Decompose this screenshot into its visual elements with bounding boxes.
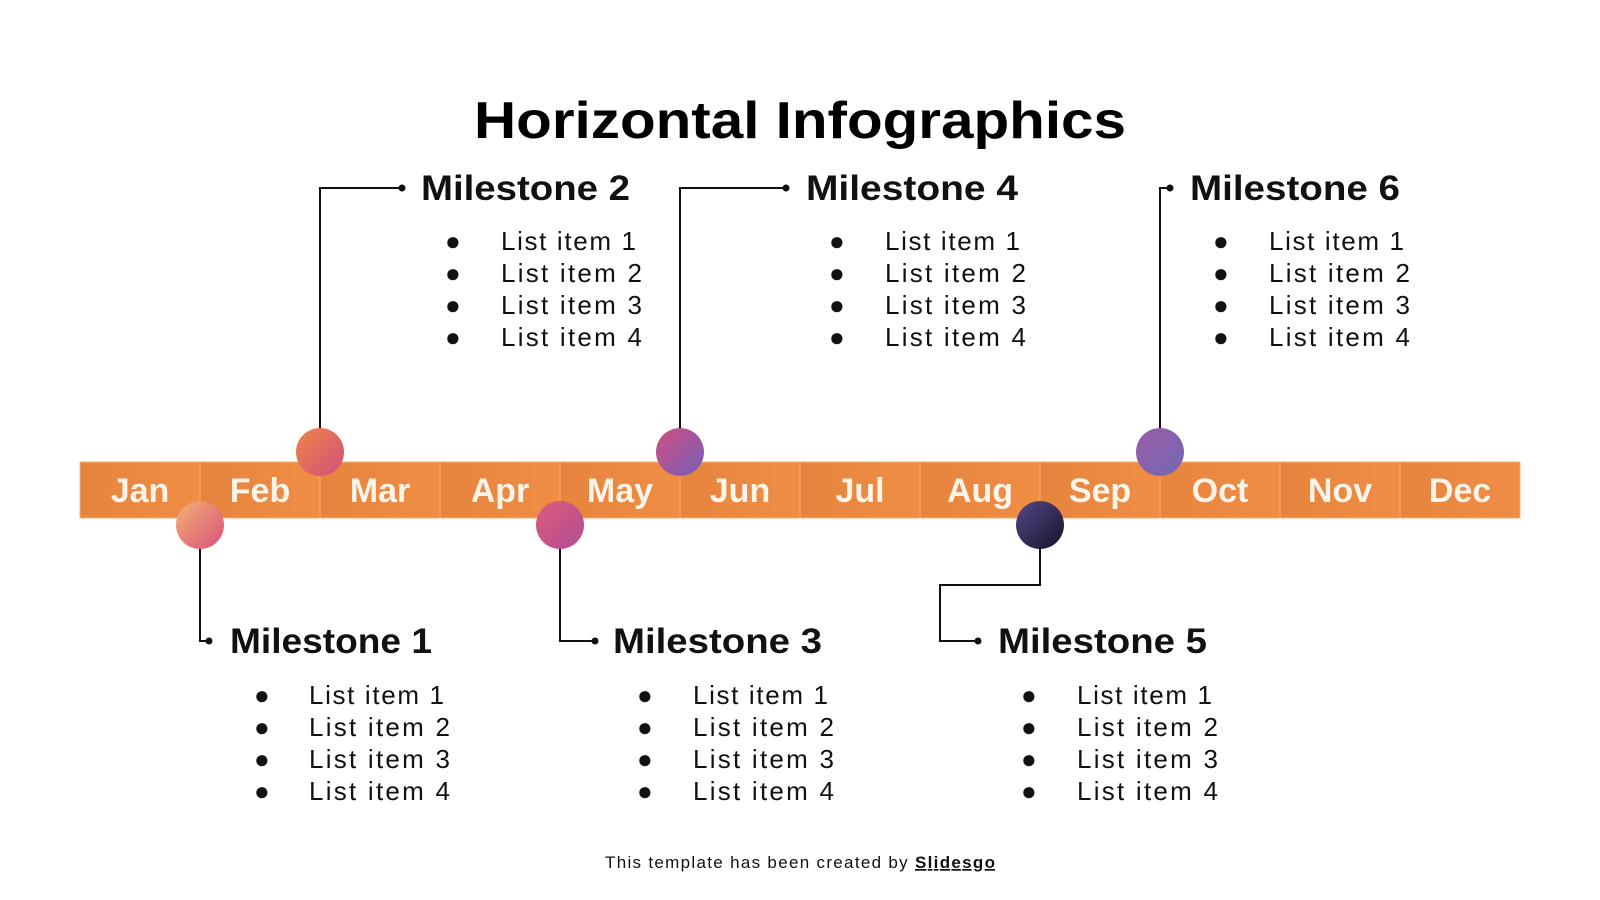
milestone 1: ● xyxy=(254,712,270,742)
milestone 4: List item 3 xyxy=(885,290,1026,320)
milestone 5: List item 3 xyxy=(1077,744,1218,774)
milestone 4: Milestone 4 xyxy=(806,169,1019,208)
milestone 1: ● xyxy=(254,744,270,774)
milestone 5: List item 1 xyxy=(1077,680,1212,710)
connectors xyxy=(200,188,1170,641)
milestone 3: List item 2 xyxy=(693,712,834,742)
title: Horizontal Infographics xyxy=(474,92,1126,150)
timeline bar: Mar xyxy=(350,472,410,510)
milestone 6: ● xyxy=(1213,290,1229,320)
timeline bar: Feb xyxy=(230,472,290,510)
milestone markers xyxy=(176,428,1184,549)
milestone 1: ● xyxy=(254,680,270,710)
milestone 3: ● xyxy=(637,744,653,774)
milestone 4: ● xyxy=(829,258,845,288)
milestone 5: List item 2 xyxy=(1077,712,1218,742)
milestone 1: List item 2 xyxy=(309,712,450,742)
milestone 4: List item 4 xyxy=(885,322,1026,352)
milestone 6: ● xyxy=(1213,322,1229,352)
milestone 2: List item 4 xyxy=(501,322,642,352)
milestone 2: ● xyxy=(445,322,461,352)
milestone 3: List item 4 xyxy=(693,776,834,806)
milestone 4: List item 1 xyxy=(885,226,1020,256)
milestone 2 xyxy=(421,169,642,352)
milestone 3: Milestone 3 xyxy=(613,622,822,661)
milestone 2: Milestone 2 xyxy=(421,169,630,208)
milestone 1 xyxy=(230,622,450,806)
milestone 5: ● xyxy=(1021,712,1037,742)
milestone 4 xyxy=(806,169,1026,352)
milestone 4: ● xyxy=(829,322,845,352)
milestone 3 xyxy=(613,622,834,806)
timeline bar: Nov xyxy=(1308,472,1372,510)
timeline bar: Sep xyxy=(1069,472,1131,510)
timeline bar: Apr xyxy=(471,472,529,510)
milestone 2: ● xyxy=(445,290,461,320)
milestone 2: ● xyxy=(445,226,461,256)
milestone 3: List item 1 xyxy=(693,680,828,710)
milestone 3: ● xyxy=(637,776,653,806)
timeline bar: Jan xyxy=(111,472,169,510)
milestone 5: ● xyxy=(1021,744,1037,774)
milestone 6: List item 3 xyxy=(1269,290,1410,320)
milestone 5: ● xyxy=(1021,680,1037,710)
timeline bar: Jun xyxy=(710,472,770,510)
milestone 4: ● xyxy=(829,226,845,256)
milestone 3: ● xyxy=(637,680,653,710)
milestone 2: List item 3 xyxy=(501,290,642,320)
milestone 6: ● xyxy=(1213,258,1229,288)
milestone 3: List item 3 xyxy=(693,744,834,774)
milestone 6: ● xyxy=(1213,226,1229,256)
milestone 5: ● xyxy=(1021,776,1037,806)
milestone 2: List item 2 xyxy=(501,258,642,288)
milestone 4: List item 2 xyxy=(885,258,1026,288)
milestone 2: List item 1 xyxy=(501,226,636,256)
timeline bar: Oct xyxy=(1192,472,1248,510)
milestone 6: List item 2 xyxy=(1269,258,1410,288)
milestone 6 xyxy=(1190,169,1410,352)
timeline bar: Jul xyxy=(835,472,885,510)
milestone 6: Milestone 6 xyxy=(1190,169,1400,208)
milestone 5: Milestone 5 xyxy=(998,622,1207,661)
milestone 1: List item 3 xyxy=(309,744,450,774)
milestone 1: List item 4 xyxy=(309,776,450,806)
milestone 3: ● xyxy=(637,712,653,742)
timeline bar xyxy=(80,462,1520,518)
timeline bar: Dec xyxy=(1429,472,1491,510)
milestone 6: List item 4 xyxy=(1269,322,1410,352)
milestone 2: ● xyxy=(445,258,461,288)
footer credit: This template has been created by Slidesgo xyxy=(605,853,995,872)
milestone 6: List item 1 xyxy=(1269,226,1404,256)
milestone 5 xyxy=(998,622,1218,806)
milestone 1: ● xyxy=(254,776,270,806)
milestone 4: ● xyxy=(829,290,845,320)
timeline bar: Aug xyxy=(947,472,1013,510)
milestone 5: List item 4 xyxy=(1077,776,1218,806)
timeline bar: May xyxy=(587,472,653,510)
milestone 1: Milestone 1 xyxy=(230,622,432,661)
milestone 1: List item 1 xyxy=(309,680,444,710)
